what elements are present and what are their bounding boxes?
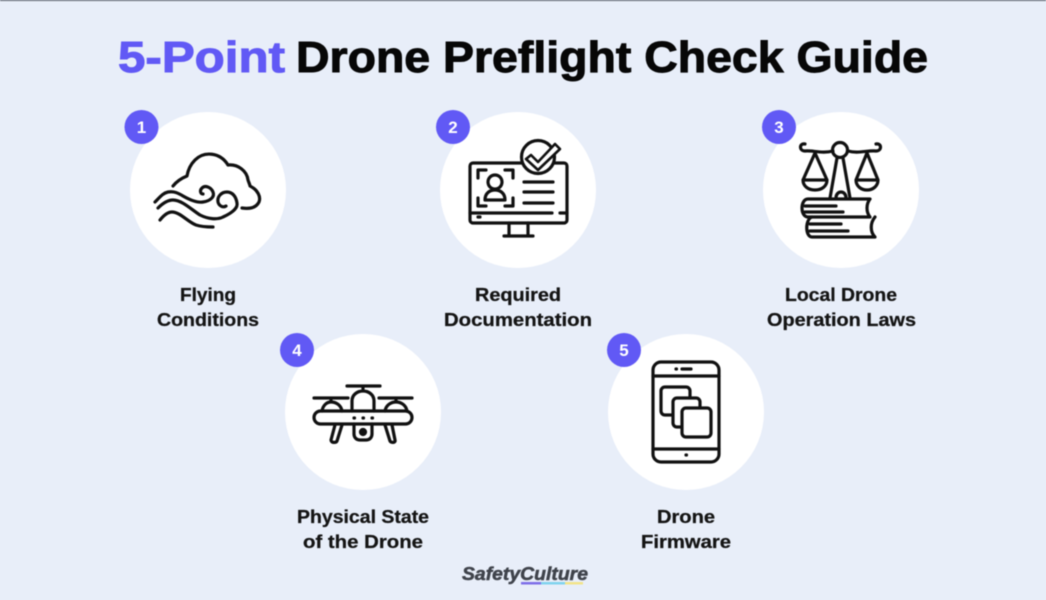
badge 3 (762, 110, 796, 144)
badge 5 (607, 333, 641, 367)
label: required documentation (444, 285, 592, 330)
badge 2: 2 (448, 118, 458, 137)
label: physical state of the drone: of the Drone (303, 532, 423, 552)
label: physical state of the drone (297, 507, 429, 552)
badge 2 (436, 110, 470, 144)
label: flying conditions (157, 285, 259, 330)
panel: step 3 local drone operation laws (762, 110, 919, 330)
badge 4 (280, 333, 314, 367)
icon: smartphone with layers (653, 362, 719, 462)
logo: SafetyCulture: SafetyCulture (462, 564, 588, 584)
icon: wind and cloud (155, 154, 260, 227)
panel: step 4 physical state of the drone (280, 333, 441, 552)
label: required documentation: Required (475, 285, 561, 305)
icon: monitor with id and check (470, 140, 567, 236)
label: local drone operation laws (767, 285, 916, 330)
label: local drone operation laws: Local Drone (785, 285, 897, 305)
icon: scales and books (800, 142, 880, 237)
badge 1 (124, 110, 158, 144)
icon: drone (314, 386, 412, 442)
label: drone firmware (641, 507, 731, 552)
label: physical state of the drone: Physical State (297, 507, 429, 527)
title: Drone Preflight Check Guide (296, 33, 928, 82)
label: flying conditions: Flying (180, 285, 236, 305)
label: drone firmware: Firmware (641, 532, 731, 552)
panel: step 5 drone firmware (607, 333, 764, 552)
panel: step 1 flying conditions (124, 110, 286, 330)
label: drone firmware: Drone (657, 507, 715, 527)
badge 1: 1 (137, 118, 146, 137)
label: required documentation: Documentation (444, 310, 592, 330)
label: local drone operation laws: Operation Laws (767, 310, 916, 330)
badge 3: 3 (774, 118, 784, 137)
badge 4: 4 (292, 341, 302, 360)
badge 5: 5 (619, 341, 629, 360)
label: flying conditions: Conditions (157, 310, 259, 330)
title: 5-Point (118, 33, 285, 82)
panel: step 2 required documentation (436, 110, 596, 330)
